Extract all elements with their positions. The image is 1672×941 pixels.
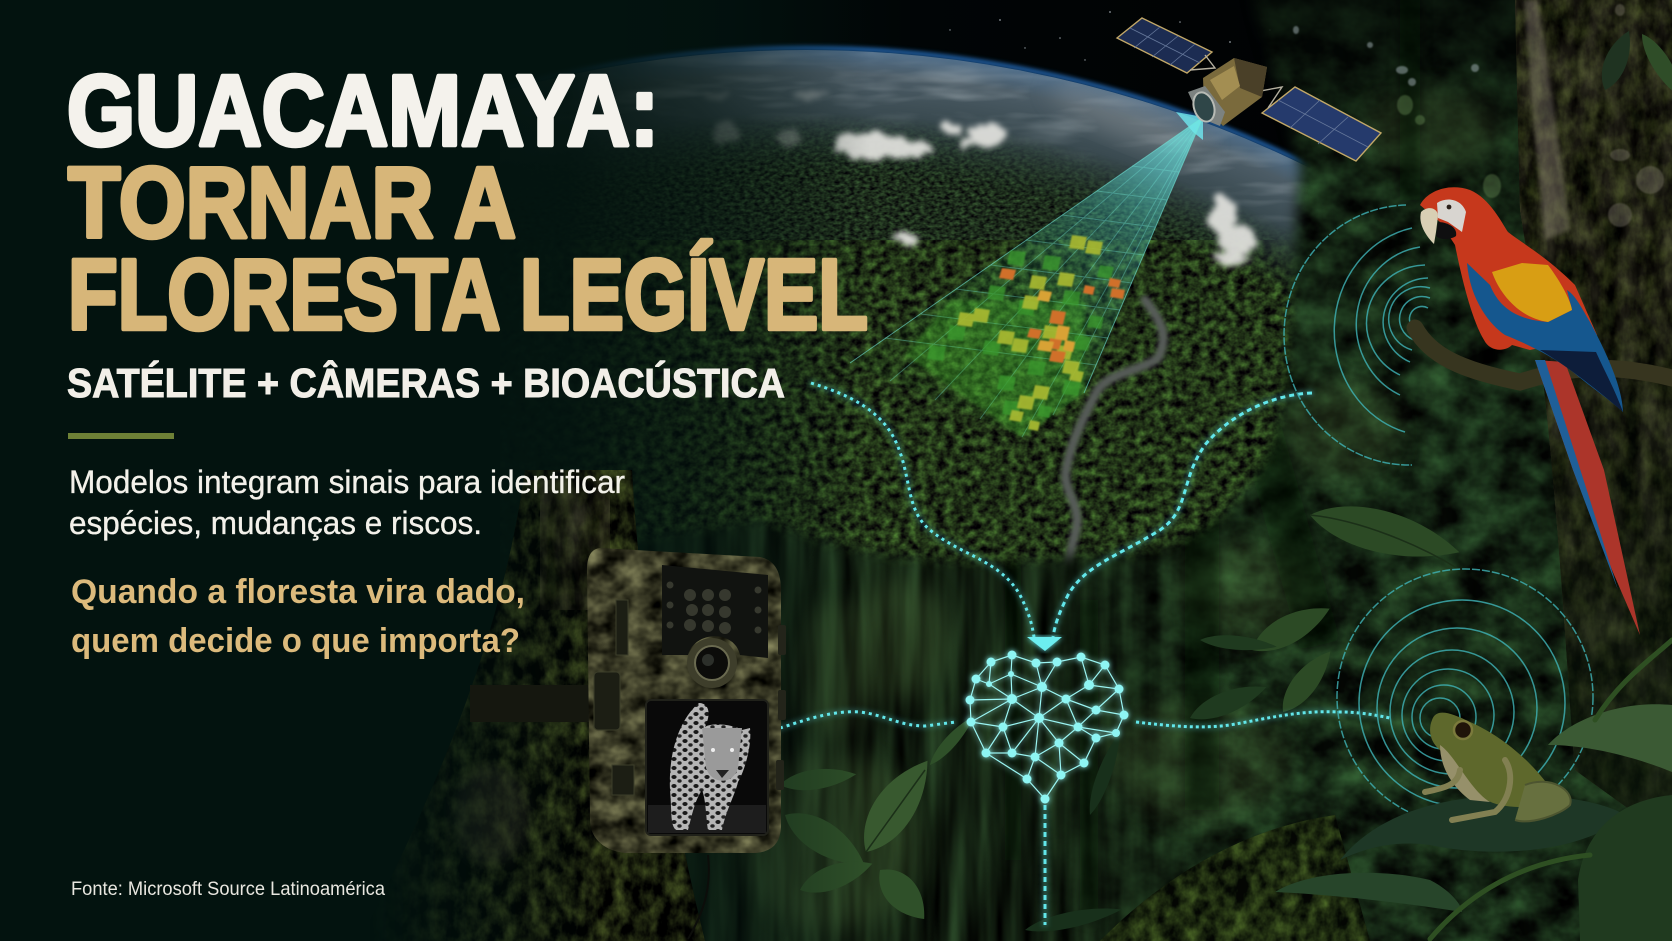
satellite scan beam	[850, 112, 1203, 437]
right tree trunk	[1510, 0, 1672, 850]
dark jungle background	[638, 0, 1627, 941]
body text	[69, 464, 625, 541]
satellite	[1117, 18, 1381, 161]
camera side clips	[776, 625, 786, 790]
arrowhead into network	[1027, 637, 1062, 651]
question callout: quem decide o que importa?	[71, 622, 520, 660]
body text: espécies, mudanças e riscos.	[69, 505, 482, 541]
neural network in heart/brain shape	[966, 650, 1128, 804]
white face	[1437, 200, 1466, 232]
title: TORNAR A	[68, 147, 516, 259]
cable	[688, 855, 709, 939]
IR LED panel	[662, 565, 768, 658]
tail	[1535, 360, 1640, 635]
sound waves from macaw	[1284, 205, 1430, 465]
leaf under frog	[1340, 795, 1625, 860]
moss covered log	[1100, 810, 1380, 941]
side latches	[594, 600, 634, 795]
camera trap	[470, 545, 786, 939]
dotted data lines	[780, 383, 1390, 925]
strap	[470, 685, 595, 722]
foliage mid-ground	[777, 494, 1465, 937]
forest change data cells	[905, 300, 1085, 437]
beak	[1420, 208, 1438, 244]
accent rule	[68, 433, 174, 439]
source: Fonte: Microsoft Source Latinoamérica	[71, 878, 385, 900]
left mossy tree trunk	[412, 470, 705, 941]
camera body	[585, 545, 785, 855]
title: GUACAMAYA:	[67, 55, 659, 167]
earth with rainforest seen from orbit	[575, 42, 1308, 568]
question callout	[71, 573, 525, 660]
screen with jaguar	[646, 700, 768, 835]
lens	[687, 638, 737, 688]
foreground leaves	[1275, 640, 1672, 941]
frog	[1425, 713, 1571, 821]
title: FLORESTA LEGÍVEL	[68, 239, 868, 351]
yellow wing band	[1492, 263, 1572, 322]
subtitle: SATÉLITE + CÂMERAS + BIOACÚSTICA	[67, 360, 785, 406]
red head and body	[1420, 187, 1597, 350]
question callout: Quando a floresta vira dado,	[71, 573, 525, 611]
title	[67, 55, 868, 351]
body text: Modelos integram sinais para identificar	[69, 464, 625, 500]
blue wing	[1467, 263, 1623, 412]
clouds	[701, 91, 1260, 266]
space with stars	[620, 0, 1340, 180]
macaw	[1420, 187, 1640, 635]
sound waves from frog	[1337, 569, 1593, 825]
satellite body	[1188, 58, 1267, 126]
left solar panel	[1117, 18, 1212, 73]
river	[1065, 300, 1163, 580]
right solar panel	[1262, 87, 1381, 161]
branch	[1415, 328, 1672, 382]
